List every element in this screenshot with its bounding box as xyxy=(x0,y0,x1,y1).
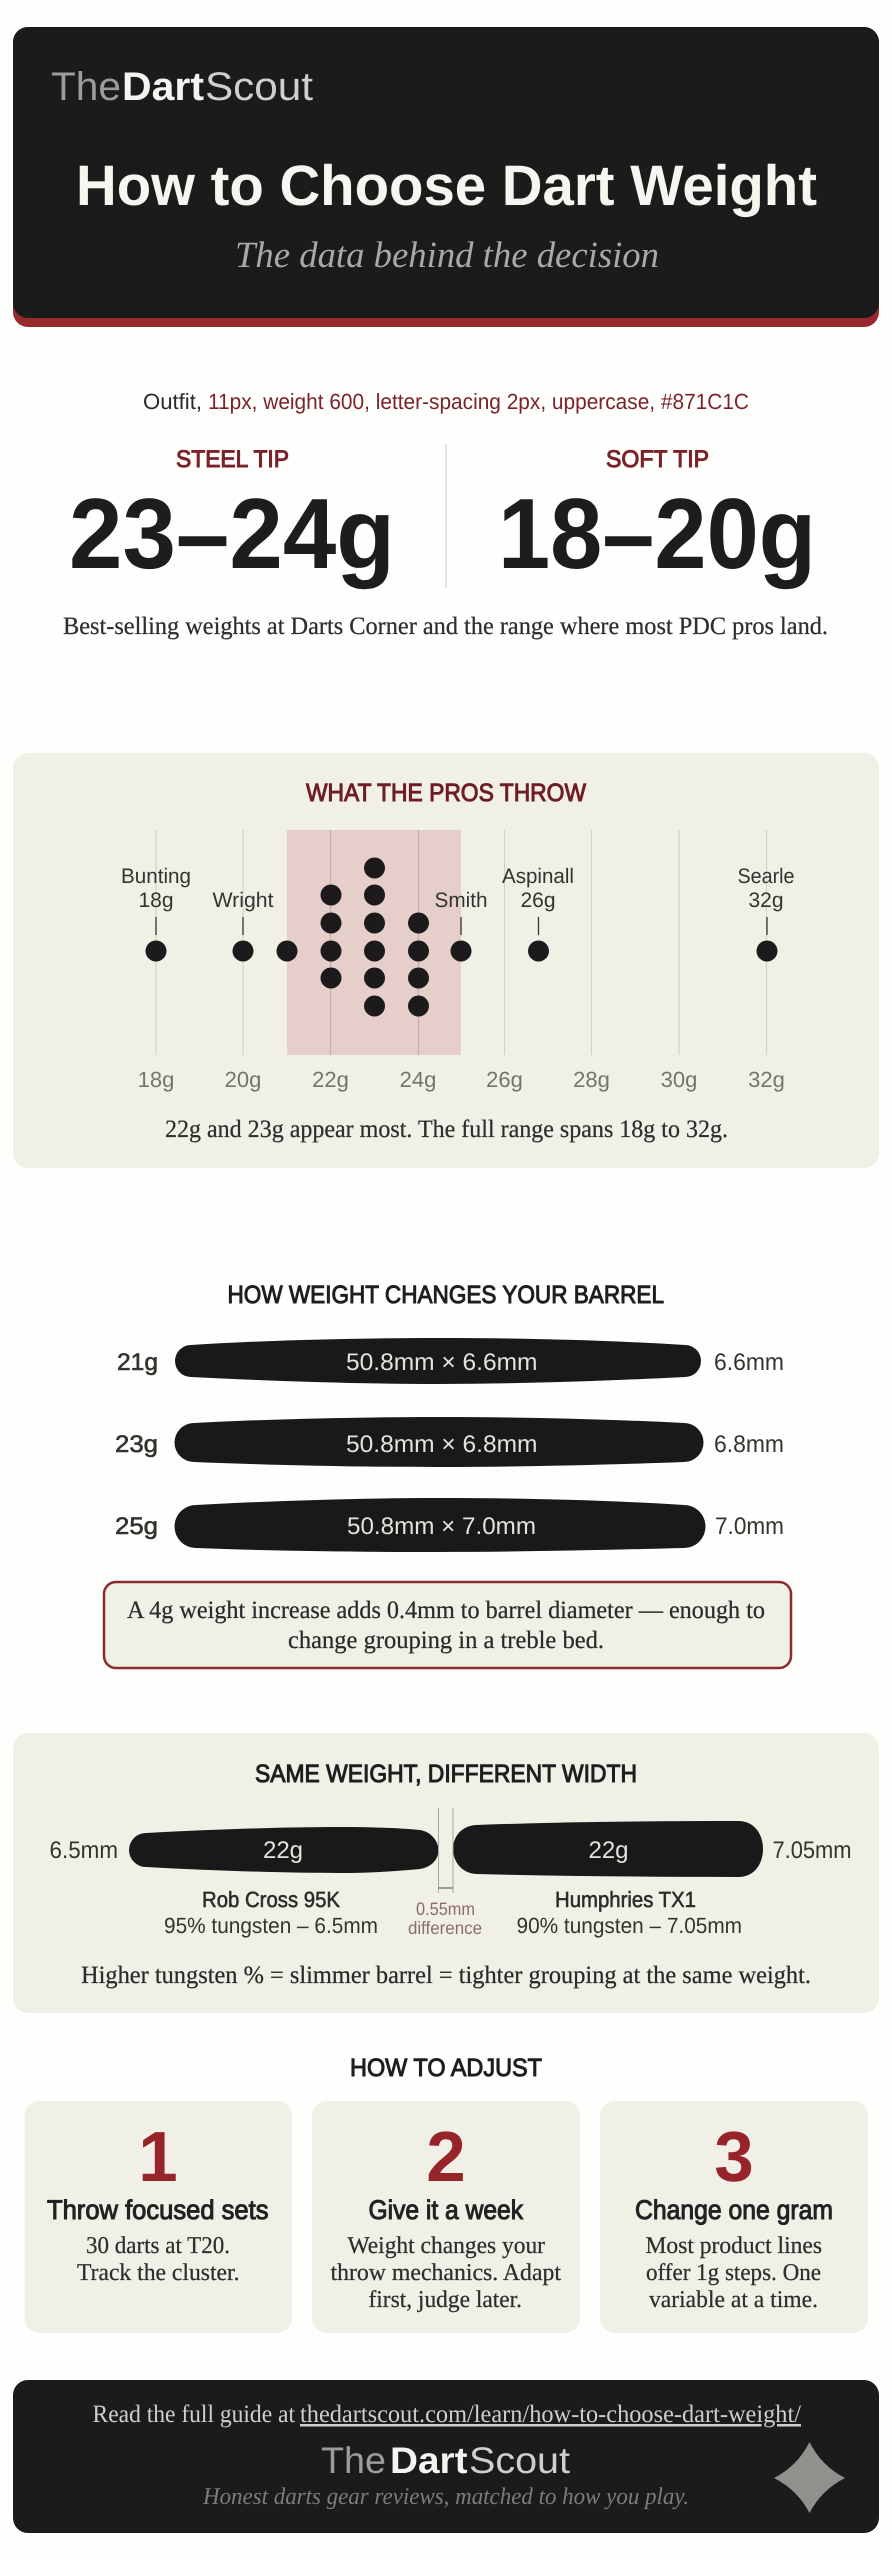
card: step 2 xyxy=(312,2101,580,2333)
subtitle: The data behind the decision xyxy=(235,235,659,276)
axis labels: 26g xyxy=(486,1067,523,1092)
player labels: 32g xyxy=(748,889,784,912)
difference marker: 0.55mm xyxy=(416,1899,475,1919)
card: step 2: 2 xyxy=(426,2118,466,2197)
heading: SAME WEIGHT, DIFFERENT WIDTH xyxy=(255,1760,637,1788)
axis labels: 24g xyxy=(400,1067,436,1092)
card: step 3: offer 1g steps. One xyxy=(646,2260,821,2286)
barrel: Humphries TX1: 7.05mm xyxy=(772,1837,852,1864)
section: how weight changes your barrel xyxy=(104,1281,791,1668)
panel: same weight, different width xyxy=(13,1733,879,2013)
barrel: 25g: 7.0mm xyxy=(715,1513,784,1540)
axis labels: 28g xyxy=(573,1067,610,1092)
player labels: Smith xyxy=(434,889,488,912)
barrel: 21g xyxy=(117,1338,784,1384)
difference marker: difference xyxy=(408,1918,482,1938)
callout: A 4g weight increase adds 0.4mm to barrel diameter — enough to xyxy=(127,1597,765,1624)
title: How to Choose Dart Weight xyxy=(76,154,817,218)
stat: soft tip: 18–20g xyxy=(498,478,816,590)
card: step 2: first, judge later. xyxy=(368,2287,522,2313)
card: step 3: 3 xyxy=(714,2118,754,2197)
stat: steel tip: 23–24g xyxy=(69,478,395,590)
chart caption: 22g and 23g appear most. The full range spans 18g to 32g. xyxy=(165,1116,728,1143)
panel: what the pros throw xyxy=(13,753,879,1168)
barrel: 25g: 25g xyxy=(115,1513,158,1540)
player labels: Wright xyxy=(212,889,274,912)
barrel: 23g: 50.8mm × 6.8mm xyxy=(346,1431,538,1458)
card: step 3: variable at a time. xyxy=(649,2287,818,2313)
barrel: Humphries TX1: 90% tungsten – 7.05mm xyxy=(516,1913,742,1938)
card: step 1: 30 darts at T20. xyxy=(86,2233,230,2259)
card: step 3: Change one gram xyxy=(635,2195,833,2225)
card: step 1 xyxy=(24,2101,292,2333)
barrel: 21g: 50.8mm × 6.6mm xyxy=(346,1349,538,1376)
barrel: Humphries TX1: Humphries TX1 xyxy=(555,1887,696,1912)
callout: change grouping in a treble bed. xyxy=(288,1627,604,1654)
logo: TheDartScout: Scout xyxy=(205,65,313,109)
barrel: Humphries TX1: 22g xyxy=(588,1837,629,1864)
footer logo: Dart xyxy=(390,2440,468,2481)
difference marker xyxy=(408,1808,482,1938)
heading: HOW WEIGHT CHANGES YOUR BARREL xyxy=(228,1281,664,1309)
barrel: Humphries TX1 xyxy=(453,1821,852,1938)
player labels: 18g xyxy=(138,889,174,912)
card: step 1: 1 xyxy=(138,2118,178,2197)
logo: TheDartScout: Dart xyxy=(122,65,204,109)
heading: WHAT THE PROS THROW xyxy=(306,779,586,807)
card: step 2: Give it a week xyxy=(368,2195,523,2225)
footer logo: Scout xyxy=(469,2440,571,2481)
barrel: 23g: 23g xyxy=(115,1431,158,1458)
footer banner xyxy=(13,2380,879,2533)
barrel: Rob Cross 95K: Rob Cross 95K xyxy=(202,1887,340,1912)
callout xyxy=(104,1582,791,1668)
barrel: 21g: 21g xyxy=(117,1349,158,1376)
barrel: Rob Cross 95K: 95% tungsten – 6.5mm xyxy=(164,1913,378,1938)
axis labels: 32g xyxy=(748,1067,785,1092)
stat: steel tip: STEEL TIP xyxy=(176,446,289,473)
player labels: Searle xyxy=(738,865,794,888)
heading: how to adjust: HOW TO ADJUST xyxy=(350,2054,542,2082)
axis labels: 18g xyxy=(138,1067,174,1092)
logo: TheDartScout: The xyxy=(51,65,121,109)
axis labels: 30g xyxy=(661,1067,697,1092)
barrel: Rob Cross 95K xyxy=(50,1827,438,1938)
card: step 2: throw mechanics. Adapt xyxy=(330,2260,561,2286)
footer logo xyxy=(321,2440,571,2481)
header banner xyxy=(13,27,879,327)
card: step 2: Weight changes your xyxy=(348,2233,545,2259)
tagline: Honest darts gear reviews, matched to how you play. xyxy=(202,2484,689,2510)
barrel: 25g xyxy=(115,1498,784,1552)
card: step 1: Track the cluster. xyxy=(77,2260,240,2286)
player labels: Aspinall xyxy=(502,865,574,888)
icon: four-point star xyxy=(774,2442,845,2513)
logo: TheDartScout xyxy=(51,65,313,109)
player labels: Bunting xyxy=(121,865,191,888)
stray style note: Outfit, xyxy=(143,389,202,414)
barrel: Rob Cross 95K: 6.5mm xyxy=(50,1837,118,1864)
barrel: 25g: 50.8mm × 7.0mm xyxy=(347,1513,536,1540)
barrel: 23g: 6.8mm xyxy=(714,1431,784,1458)
player labels xyxy=(121,865,794,912)
caption: Higher tungsten % = slimmer barrel = tighter grouping at the same weight. xyxy=(81,1962,811,1989)
guide link text xyxy=(92,2401,801,2428)
barrel: 21g: 6.6mm xyxy=(714,1349,784,1376)
barrel: Rob Cross 95K: 22g xyxy=(263,1837,303,1864)
axis labels: 22g xyxy=(312,1067,349,1092)
axis labels: 20g xyxy=(225,1067,261,1092)
card: step 3: Most product lines xyxy=(646,2233,822,2259)
stray style note: 11px, weight 600, letter-spacing 2px, uppercase, #871C1C xyxy=(208,389,749,414)
card: step 1: Throw focused sets xyxy=(47,2195,268,2225)
guide link text: thedartscout.com/learn/how-to-choose-dart-weight/ xyxy=(300,2401,801,2428)
axis labels xyxy=(138,1067,785,1092)
barrel: 23g xyxy=(115,1417,784,1467)
stat caption: Best-selling weights at Darts Corner and the range where most PDC pros land. xyxy=(63,613,828,640)
card: step 3 xyxy=(600,2101,868,2333)
footer logo: The xyxy=(321,2440,386,2481)
player labels: 26g xyxy=(520,889,556,912)
highlighted range band xyxy=(287,830,461,1055)
stat: soft tip: SOFT TIP xyxy=(606,446,709,473)
guide link text: Read the full guide at xyxy=(92,2401,295,2428)
dot plot xyxy=(146,858,778,1016)
